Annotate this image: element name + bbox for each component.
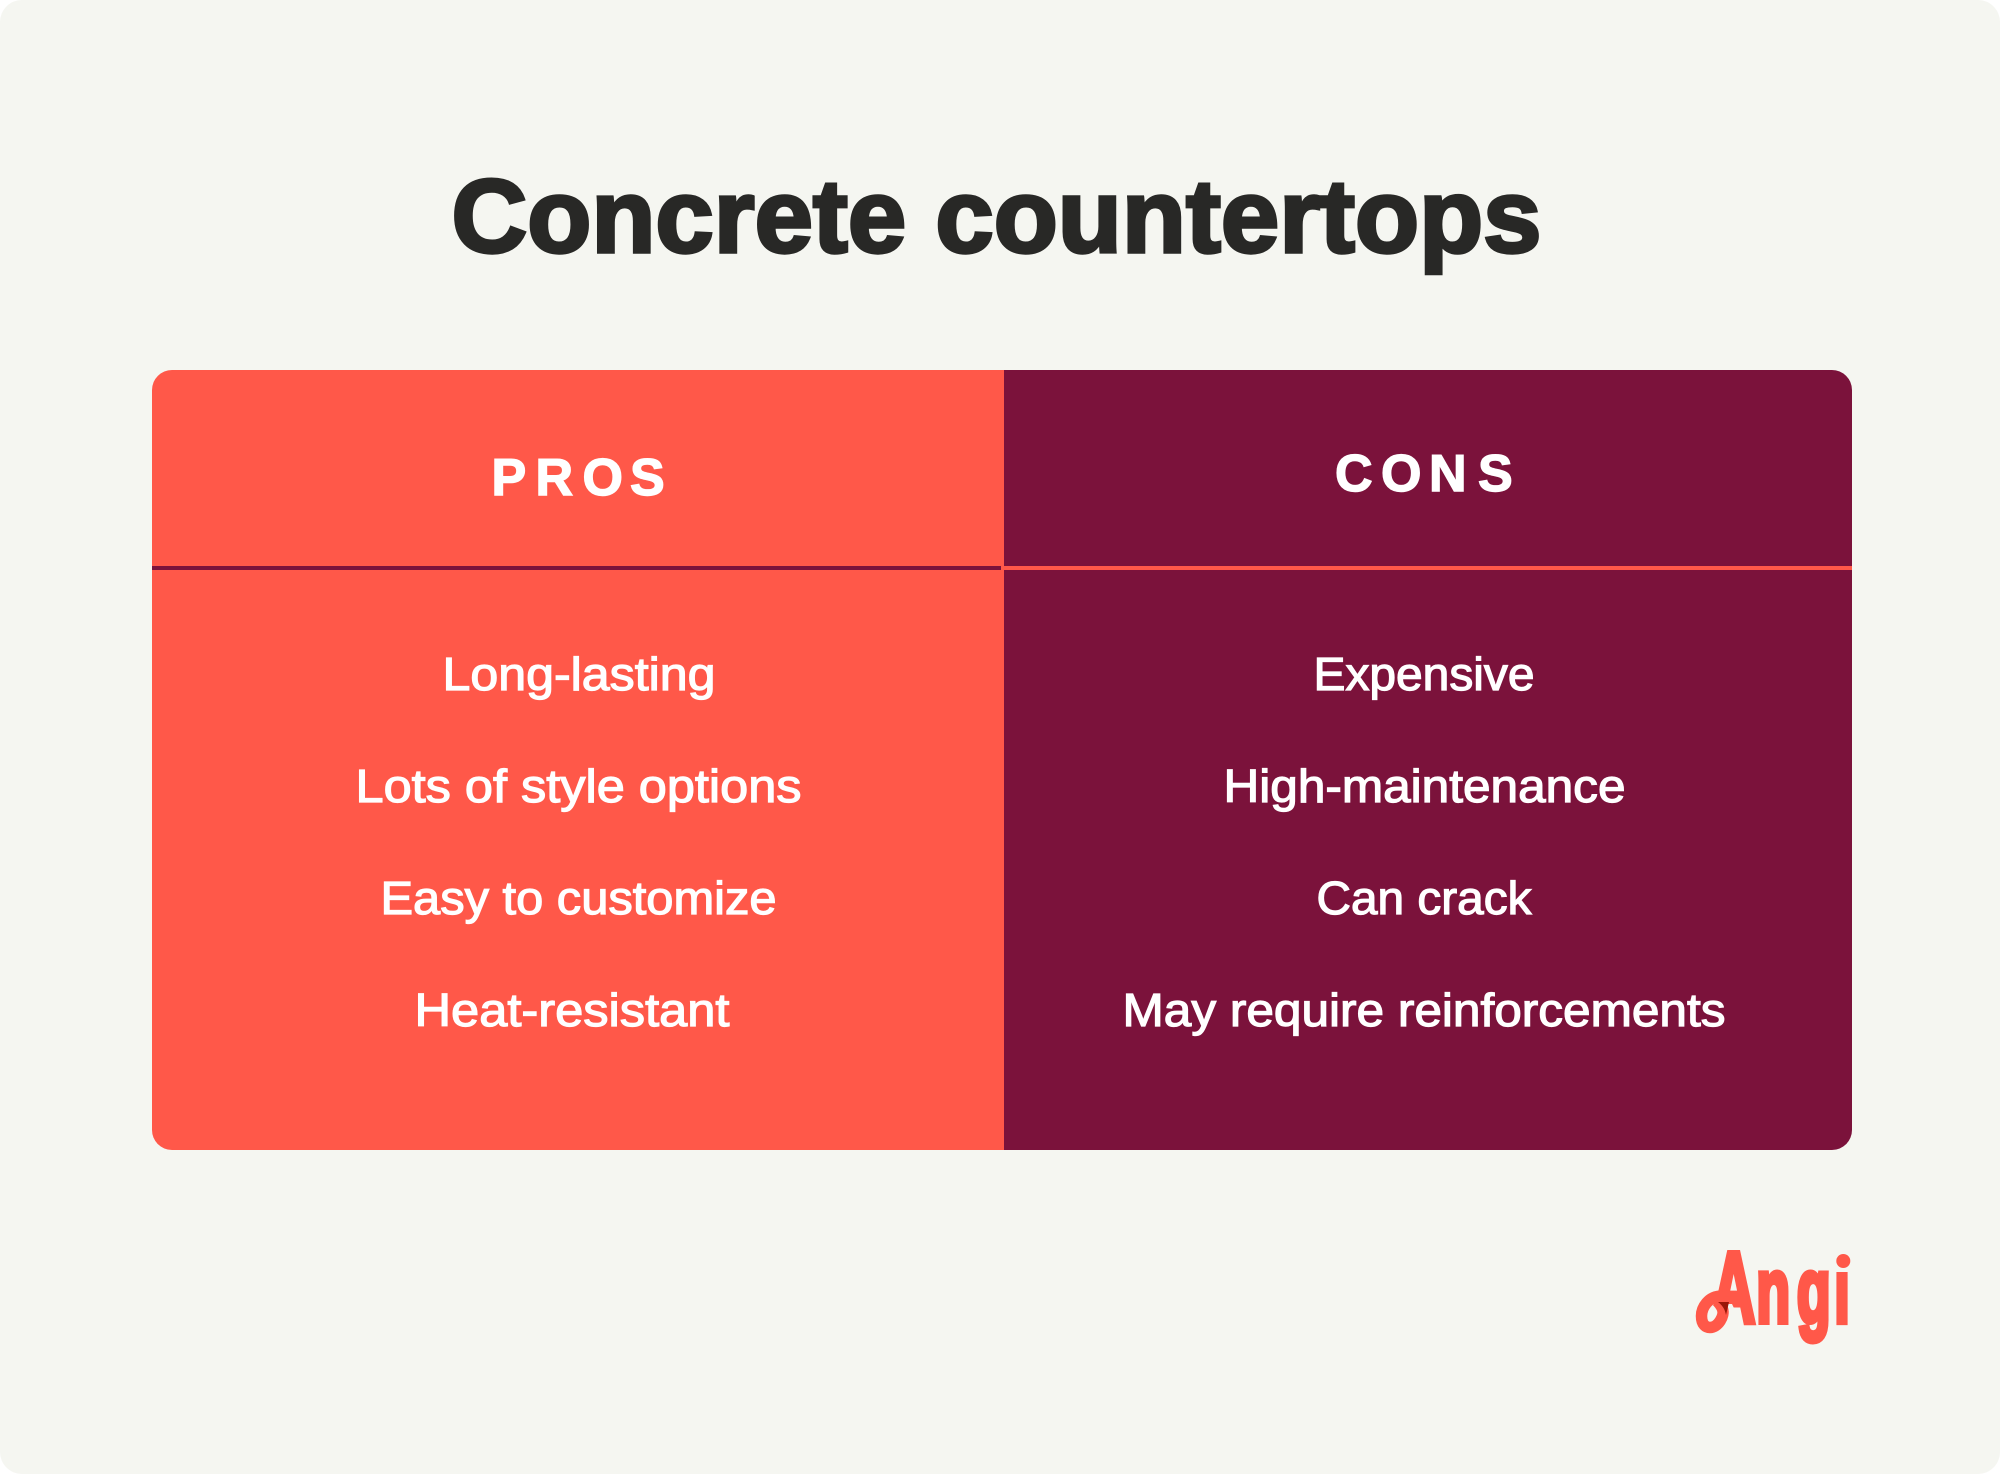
pros heading: PROS bbox=[492, 449, 665, 507]
pros background bbox=[152, 370, 1004, 1150]
logo i dot bbox=[1836, 1254, 1850, 1268]
logo loop bbox=[1702, 1296, 1723, 1328]
logo wordmark: A bbox=[1712, 1232, 1755, 1344]
pro item: customize: Easy to customize bbox=[380, 872, 776, 924]
cons heading: CONS bbox=[1335, 445, 1513, 503]
logo wordmark: ngi bbox=[1756, 1240, 1850, 1343]
pros divider bbox=[152, 566, 1001, 570]
cons list bbox=[1122, 648, 1726, 1036]
con item: high-maintenance: High-maintenance bbox=[1224, 760, 1626, 812]
cons divider bbox=[1004, 566, 1852, 570]
logo fold shadow bbox=[1718, 1302, 1729, 1315]
con item: may require reinforcements: May require reinforcements bbox=[1122, 984, 1726, 1036]
pro item: heat-resistant: Heat-resistant bbox=[414, 984, 730, 1036]
pro item: style options: Lots of style options bbox=[356, 760, 802, 812]
logo: Angi bbox=[1702, 1232, 1854, 1344]
con item: expensive: Expensive bbox=[1314, 648, 1534, 700]
panel: pros bbox=[152, 370, 1004, 1150]
con item: can crack: Can crack bbox=[1316, 872, 1533, 924]
pro item: long-lasting: Long-lasting bbox=[442, 648, 716, 700]
cons background bbox=[1004, 370, 1852, 1150]
logo i-dot mask bbox=[1834, 1240, 1854, 1272]
pros list bbox=[356, 648, 802, 1036]
panel: cons bbox=[1004, 370, 1852, 1150]
logo opening mask bbox=[1706, 1304, 1743, 1336]
title: Concrete countertops bbox=[452, 159, 1542, 275]
